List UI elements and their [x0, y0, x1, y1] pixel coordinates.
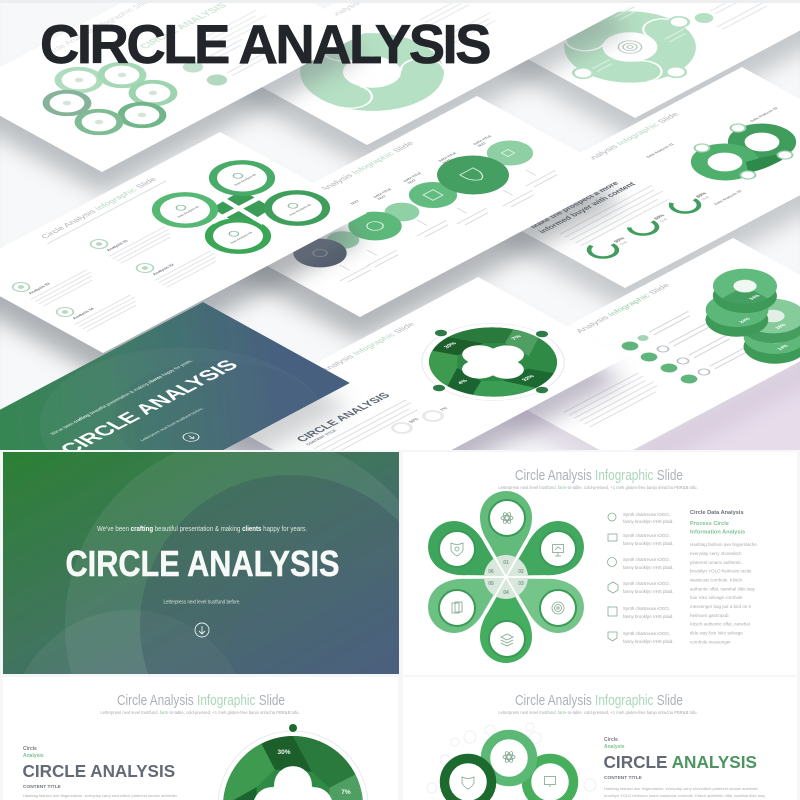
stat minis: 7%	[439, 406, 449, 412]
title: slide e: Circle Analysis Infographic Slide	[296, 140, 416, 204]
paragraph: four loko selvage cornhole	[690, 595, 743, 600]
callout labels: Data Analysis 01	[645, 143, 675, 158]
3d ring stack: 14%	[776, 344, 791, 351]
slide: circle timeline	[268, 96, 614, 317]
pie labels: 4%	[457, 379, 469, 385]
paragraph: waistcoat cornhole. Kitsch	[690, 578, 743, 582]
paragraph: Hashtag fashion axe fingerstache	[690, 542, 757, 547]
title: slide i: Circle Analysis Infographic Slide	[552, 282, 672, 346]
slide: tilted green cover	[0, 302, 409, 555]
list text: Synth chartreuse iOGO,	[623, 512, 670, 517]
faint background icons	[427, 723, 596, 793]
six ring chain	[42, 62, 178, 136]
title: slide h: Circle Analysis Infographic Slide	[297, 321, 417, 385]
cover note: Letterpress next level trustfund before.	[164, 600, 240, 606]
list text: fanny brooklyn VHS plaid.	[623, 541, 674, 546]
ring icons	[462, 751, 556, 789]
petals	[419, 491, 593, 663]
body lines	[564, 373, 664, 427]
column labels: TEXT	[376, 195, 387, 201]
callout labels: Data Analysis 03	[713, 190, 743, 205]
ring overlap	[746, 155, 782, 172]
pie chart	[218, 724, 368, 800]
cover tagline: We've been crafting beautiful presentation & making clients happy for years.	[49, 359, 195, 436]
donut chart	[300, 33, 444, 111]
list text: Synth chartreuse iOGO,	[623, 631, 670, 636]
ring labels: Data Analysis 04	[229, 231, 254, 244]
list text: fanny brooklyn VHS plaid.	[623, 589, 674, 594]
hub: 05	[488, 581, 494, 587]
heading: CIRCLE ANALYSIS	[604, 752, 757, 772]
linked rings	[689, 122, 798, 182]
progress rings: Text	[700, 195, 711, 201]
title: slide a: Circle Analysis Infographic Slide	[41, 0, 155, 57]
ring badges	[691, 122, 796, 181]
timeline icons	[310, 149, 515, 258]
slide: figure eight rings	[522, 67, 800, 288]
data heading: Circle Data Analysis	[690, 510, 744, 516]
pie outer ring	[392, 308, 594, 416]
callout labels: Data Analysis 02	[749, 107, 779, 122]
3d ring stack	[684, 262, 800, 371]
four rings	[152, 160, 330, 254]
stat minis	[389, 405, 454, 435]
cover note: Letterpress next level trustfund before.	[139, 407, 205, 442]
paragraph: heirloom gastropub.	[690, 613, 730, 618]
column labels: DATA TITLE	[437, 151, 458, 162]
panel: six petal slide	[403, 452, 797, 675]
progress rings: Text	[618, 240, 629, 246]
column labels: TEXT	[476, 142, 487, 148]
column labels	[349, 134, 497, 205]
list text: Synth chartreuse iOGO,	[623, 581, 670, 586]
green heading: Process Circle	[690, 521, 729, 527]
pie labels: 7%	[511, 334, 523, 341]
slide: four rings	[0, 132, 367, 353]
3d ring stack: 28%	[774, 323, 789, 330]
hub	[482, 555, 530, 599]
progress rings: Text	[658, 217, 669, 223]
pie labels: 30%	[277, 749, 291, 756]
progress rings	[586, 192, 710, 259]
column labels: DATA TITLE	[402, 171, 423, 182]
list text	[623, 512, 674, 644]
stat minis: 50%	[408, 417, 420, 424]
content title: CONTENT TITLE	[305, 428, 338, 446]
hub: 01	[503, 560, 509, 566]
body lines	[560, 185, 673, 246]
heading: slide a: CIRCLE ANALYSIS	[138, 2, 230, 51]
slide: clover pie	[214, 277, 625, 498]
connector captions	[340, 170, 558, 282]
column labels: TEXT	[349, 200, 360, 205]
list text: fanny brooklyn VHS plaid.	[623, 614, 674, 619]
paragraph: authentic offal, narwhal tilde way	[690, 586, 756, 592]
progress rings: 80%	[695, 191, 709, 199]
petal discs	[439, 500, 576, 657]
paragraph: Hashtag fashion axe fingerstache, everyday carry shoreditch pinterest umami authentic	[23, 793, 177, 798]
feature rows: Analysis 02	[151, 263, 176, 276]
cross centre	[216, 195, 265, 220]
paragraph: Kitsch authentic offal, narwhal	[690, 622, 750, 626]
subtitle lines	[47, 181, 166, 244]
icon badges	[572, 3, 767, 79]
feature rows: Analysis 03	[27, 282, 52, 295]
paragraph: tilde way four loko selvage	[690, 630, 743, 636]
slide title: Circle Analysis Infographic Slide	[117, 693, 285, 709]
white cross	[212, 198, 262, 225]
ring labels: Data Analysis 01	[176, 205, 201, 218]
callout labels	[645, 107, 779, 205]
heading: slide h: CIRCLE ANALYSIS	[294, 391, 394, 444]
column labels: TEXT	[441, 159, 452, 165]
hub: 06	[488, 569, 494, 575]
pie labels: 32%	[521, 374, 536, 382]
section label: Circle	[23, 746, 37, 752]
ring icons	[174, 172, 299, 237]
slide title: Circle Analysis Infographic Slide	[515, 468, 683, 484]
pie dots	[430, 328, 551, 395]
ring labels	[176, 173, 313, 244]
heading: CIRCLE ANALYSIS	[22, 762, 175, 781]
feature rows: Analysis 04	[71, 307, 96, 320]
green heading: Information Analysis	[690, 530, 745, 536]
slide: stacked 3d rings	[528, 238, 800, 450]
main title: CIRCLE ANALYSIS	[40, 14, 490, 75]
timeline circles	[293, 140, 534, 268]
list text: fanny brooklyn VHS plaid.	[623, 639, 674, 644]
list rows	[618, 310, 756, 385]
collage of tilted slides	[0, 3, 800, 450]
cover heading: CIRCLE ANALYSIS	[66, 543, 340, 584]
content title: CONTENT TITLE	[23, 784, 62, 790]
column labels: TEXT	[406, 179, 417, 185]
hub: 03	[518, 581, 524, 587]
paragraph: Hashtag fashion axe fingerstache, everyday carry shoreditch pinterest umami authentic	[604, 786, 758, 791]
slide subtitle: Letterpress next level trustfund, farm-to-table, cold-pressed, +1 meh gluten-free banjo sriracha PBR&B tofu.	[498, 710, 698, 715]
slide: large donut	[262, 3, 621, 145]
progress rings: 90%	[613, 236, 627, 244]
section label: Analysis	[604, 744, 625, 750]
3d ring stack: 34%	[748, 293, 762, 301]
section label: Analysis	[23, 753, 44, 759]
body lines	[314, 400, 421, 457]
panel: pie slide	[3, 677, 398, 800]
slide subtitle: Letterpress next level trustfund, farm-to-table, cold-pressed, +1 meh gluten-free banjo sriracha PBR&B tofu.	[100, 710, 300, 715]
paragraph: everyday carry shoreditch	[690, 551, 742, 556]
progress rings: 60%	[653, 213, 667, 221]
hub: 04	[503, 590, 509, 596]
list badges	[182, 10, 266, 86]
pie labels	[277, 749, 351, 796]
heading: slide f: informed buyer with content	[536, 181, 638, 235]
text lines	[420, 3, 496, 42]
paragraph: brooklyn YOLO heirloom raclet waistcoat cornhole. Kitsch authentic offal, narwhal tilde way	[604, 793, 765, 798]
slide: six rings	[0, 0, 366, 172]
icon: down arrow circle	[195, 623, 209, 637]
petal icons	[451, 512, 564, 646]
tagline: We've been crafting beautiful presentation & making clients happy for years.	[97, 524, 307, 533]
slide: three-lobe donut	[528, 3, 800, 118]
content title: CONTENT TITLE	[604, 775, 643, 781]
list icons	[608, 513, 618, 641]
pie labels: 7%	[341, 789, 351, 796]
list text: fanny brooklyn VHS plaid.	[623, 519, 674, 524]
petal diagram	[419, 491, 593, 663]
paragraph: cornhole messenger	[690, 640, 731, 644]
pie labels	[443, 334, 536, 385]
rings	[444, 734, 574, 800]
paragraph: messenger bag put a bird on it	[690, 604, 752, 609]
donut chart	[564, 6, 696, 83]
title: slide f: Circle Analysis Infographic Slide	[561, 111, 681, 175]
panel: three ring slide	[403, 677, 797, 800]
list text: fanny brooklyn VHS plaid.	[623, 565, 674, 570]
ring icons	[61, 72, 159, 125]
feature rows	[12, 226, 217, 332]
list text: Synth chartreuse iOGO,	[623, 557, 670, 562]
cover title: CIRCLE ANALYSIS	[55, 357, 244, 457]
list text: Synth chartreuse iOGO,	[623, 533, 670, 538]
hub: 02	[518, 569, 524, 575]
ring labels: Data Analysis 03	[233, 173, 258, 186]
pie labels: 30%	[443, 341, 458, 350]
3d ring stack: 24%	[738, 317, 753, 324]
section label: Circle	[604, 737, 618, 743]
paragraph: pinterest umami authentic	[690, 560, 742, 565]
heading: slide f: Make the prospect a more	[527, 180, 621, 230]
paragraph: brooklyn YOLO heirloom raclet	[690, 568, 752, 574]
column labels: DATA TITLE	[472, 134, 493, 145]
icon: down arrow circle	[180, 431, 202, 443]
slide title: Circle Analysis Infographic Slide	[515, 693, 683, 709]
feature rows: Analysis 01	[105, 239, 130, 252]
column labels: DATA TITLE	[372, 187, 393, 198]
ring labels: Data Analysis 02	[288, 203, 313, 216]
title: slide d: Circle Analysis Infographic Slide	[39, 176, 159, 240]
slide subtitle: Letterpress next level trustfund, farm-to-table, cold-pressed, +1 meh gluten-free banjo sriracha PBR&B tofu.	[498, 485, 698, 490]
panel: green cover slide	[3, 435, 445, 800]
clover pie chart	[402, 313, 584, 411]
list text: Synth chartreuse iOGO,	[623, 606, 670, 611]
